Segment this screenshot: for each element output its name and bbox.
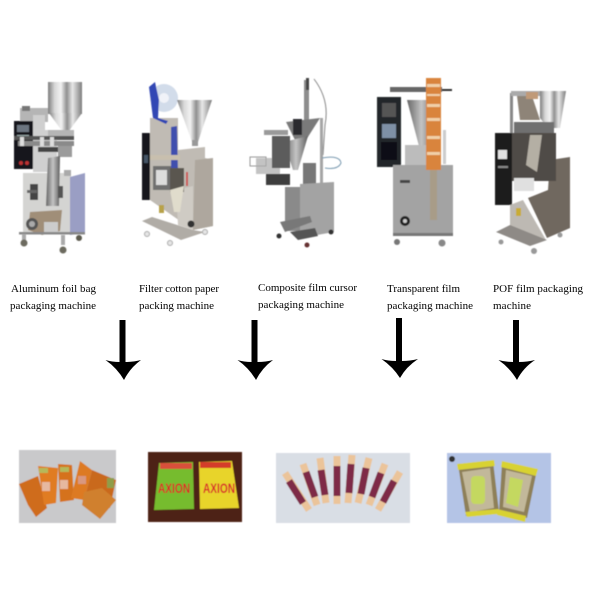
- label: aluminum foil bag packaging machine: packaging machine: [10, 300, 96, 312]
- arrow 4: [498, 320, 535, 380]
- label: POF film packaging machine: [493, 283, 584, 312]
- arrow 2: [238, 320, 273, 380]
- product photo: orange foil sachets: [19, 450, 116, 523]
- arrow 1: [106, 320, 141, 380]
- machine 5: POF film packaging machine: [495, 91, 570, 254]
- label: transparent film packaging machine: Transparent film: [387, 283, 460, 295]
- machine 1: aluminum foil bag packaging machine: [14, 82, 85, 254]
- label: composite film cursor packaging machine: [258, 282, 357, 311]
- product photo: stick sachets: [276, 453, 410, 523]
- machine 4: transparent film packaging machine: [377, 78, 453, 246]
- label: POF film packaging machine: machine: [493, 300, 531, 312]
- product photo: snack bags on blue: [447, 453, 551, 523]
- arrow 3: [382, 318, 418, 378]
- label: composite film cursor packaging machine: Composite film cursor: [258, 282, 357, 294]
- machine 3: composite film cursor packaging machine: [250, 78, 341, 248]
- product photo: Axion detergent pouches: [148, 452, 242, 522]
- label: transparent film packaging machine: packaging machine: [387, 300, 473, 312]
- label: filter cotton paper packing machine: Filter cotton paper: [139, 283, 219, 295]
- product photo: Axion detergent pouches: AXION: [203, 480, 235, 496]
- label: transparent film packaging machine: [387, 283, 473, 312]
- product photo: Axion detergent pouches: AXION: [158, 480, 190, 496]
- label: filter cotton paper packing machine: packing machine: [139, 300, 214, 312]
- label: filter cotton paper packing machine: [139, 283, 219, 312]
- label: composite film cursor packaging machine: packaging machine: [258, 299, 344, 311]
- label: aluminum foil bag packaging machine: [10, 283, 96, 312]
- machine 2: filter cotton paper packing machine: [142, 82, 213, 246]
- label: aluminum foil bag packaging machine: Aluminum foil bag: [11, 283, 96, 295]
- label: POF film packaging machine: POF film packaging: [493, 283, 584, 295]
